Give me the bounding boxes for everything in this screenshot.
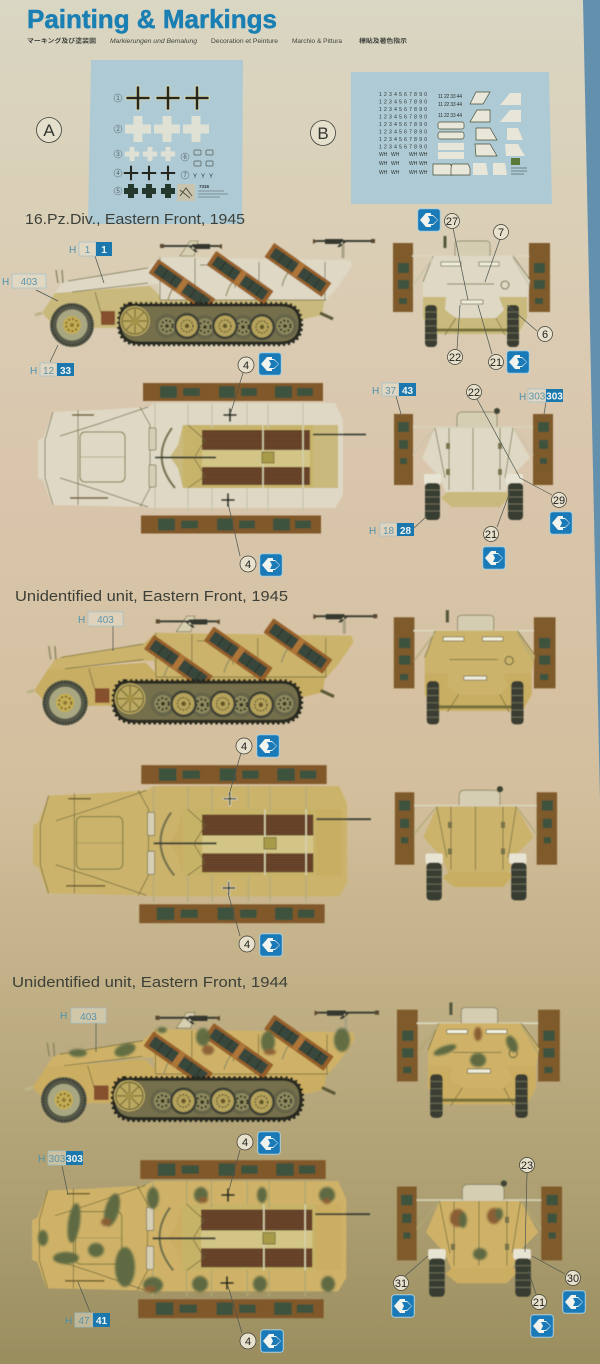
- vehicle 3 side view with camouflage: [25, 1011, 379, 1123]
- vehicle 1 front view: [393, 236, 550, 347]
- decal sheet B: 11 22 33 44: [438, 113, 462, 119]
- callout: H 403: [60, 1008, 106, 1052]
- callout: H 1 / 1: [69, 242, 112, 283]
- callout: H 403: 403: [80, 1012, 97, 1023]
- scheme heading: unidentified 1945: Unidentified unit, Eastern Front, 1945: [15, 588, 288, 605]
- callout: rear view decals: 21: [485, 529, 497, 541]
- callout: H 403: H: [2, 277, 9, 288]
- callout: H 18 / 28: H: [369, 526, 376, 537]
- callout: front view decals: [418, 209, 552, 373]
- vehicle 2 side view: [27, 614, 377, 725]
- callout: rear view decals: 30: [567, 1273, 579, 1285]
- callout: H 37 / 43: H: [372, 386, 379, 397]
- callout: H 303 / 303: 303: [529, 392, 546, 402]
- callout: H 1 / 1: H: [69, 245, 76, 256]
- callout: H 303 / 303: 303: [49, 1154, 66, 1165]
- decal sheet B: 11 22 33 44: [438, 94, 462, 100]
- decal sheet B: WH: [379, 161, 388, 167]
- decal sheet B: WH: [391, 161, 400, 167]
- decal sheet A: 1: [116, 96, 120, 102]
- marker: A: [36, 118, 62, 142]
- callout: rear view decals: 23: [521, 1160, 533, 1172]
- decal sheet B: WH: [391, 170, 400, 176]
- blue page edge strip: [583, 0, 600, 800]
- callout: H 12 / 33: 33: [60, 366, 71, 377]
- decal sheet B: 1 2 3 4 5 6 7 8 9 0: [379, 100, 427, 106]
- callout: H 303 / 303: H: [519, 392, 526, 403]
- multilingual subtitle row: [27, 37, 407, 45]
- callout: rear view decals: 31: [395, 1278, 407, 1290]
- callout: H 403: [2, 274, 58, 301]
- callout: H 303 / 303: H: [38, 1154, 45, 1165]
- callout: decal 4 lower: 4: [245, 1336, 251, 1348]
- callout: H 47 / 41: [65, 1282, 110, 1327]
- multilingual subtitle row: Markierungen und Bemalung: [110, 38, 198, 45]
- decal sheet B: WH: [409, 170, 418, 176]
- decal sheet B: WH: [379, 170, 388, 176]
- decal sheet B: WH: [409, 161, 418, 167]
- title: Painting & Markings: [27, 4, 277, 34]
- callout: front view decals: 21: [490, 357, 502, 369]
- vehicle 1 side view: [35, 239, 375, 347]
- callout: front view decals: 6: [542, 329, 548, 341]
- callout: H 403: 403: [21, 277, 38, 288]
- multilingual subtitle row: マーキング及び塗装図: [27, 37, 96, 45]
- decal sheet B: WH: [419, 152, 428, 158]
- decal sheet A: [88, 60, 243, 224]
- callout: decal 4 upper: [229, 735, 279, 795]
- callout: H 18 / 28: 18: [383, 526, 394, 537]
- callout: decal 4 lower: [228, 1286, 283, 1352]
- callout: decal 4 lower: [228, 893, 282, 956]
- callout: rear view decals: 21: [533, 1297, 545, 1309]
- decal sheet B: 1 2 3 4 5 6 7 8 9 0: [379, 130, 427, 136]
- callout: H 303 / 303: [38, 1151, 83, 1195]
- vehicle 2 front view: [394, 610, 556, 724]
- callout: H 37 / 43: 37: [385, 386, 396, 397]
- decal sheet B: 1 2 3 4 5 6 7 8 9 0: [379, 122, 427, 128]
- callout: H 12 / 33: H: [30, 366, 37, 377]
- callout: H 1 / 1: 1: [101, 245, 107, 256]
- decal sheet B: 1 2 3 4 5 6 7 8 9 0: [379, 137, 427, 143]
- callout: decal 4 lower: 4: [245, 559, 251, 571]
- decal sheet B: 11 22 33 44: [438, 102, 462, 108]
- decal sheet B: WH: [391, 152, 400, 158]
- vehicle 2 rear view: [395, 786, 557, 900]
- decal sheet B: 1 2 3 4 5 6 7 8 9 0: [379, 114, 427, 120]
- callout: front view decals: 27: [446, 216, 458, 228]
- multilingual subtitle row: 標貼及著色指示: [359, 37, 407, 45]
- callout: decal 4 lower: 4: [244, 939, 250, 951]
- callout: decal 4 upper: [231, 353, 281, 412]
- decal sheet A: 4: [116, 171, 120, 177]
- decal sheet A: 6: [183, 155, 187, 161]
- decal sheet A: 5: [116, 189, 120, 195]
- multilingual subtitle row: Decoration et Peinture: [211, 38, 279, 45]
- marker: B: B: [317, 124, 329, 143]
- callout: H 403: H: [78, 615, 85, 626]
- marker: A: A: [43, 121, 55, 140]
- decal sheet B: 1 2 3 4 5 6 7 8 9 0: [379, 144, 427, 150]
- callout: H 403: H: [60, 1011, 67, 1022]
- multilingual subtitle row: Marchio & Pittura: [292, 38, 343, 45]
- callout: H 12 / 33: [30, 345, 74, 377]
- callout: rear view decals: [466, 384, 572, 569]
- callout: rear view decals: 22: [468, 387, 480, 399]
- callout: front view decals: 22: [449, 352, 461, 364]
- decal sheet A: 2: [116, 127, 120, 133]
- callout: H 403: 403: [97, 615, 114, 626]
- callout: rear view decals: 29: [553, 495, 565, 507]
- vehicle 3 rear view with camouflage: [397, 1180, 562, 1297]
- callout: decal 4 upper: 4: [243, 360, 249, 372]
- vehicle 2 top view: [33, 765, 371, 923]
- callout: rear view decals: [392, 1158, 585, 1337]
- vehicle 1 top view: [38, 383, 366, 534]
- vehicle 3 front view with camouflage: [397, 1002, 560, 1118]
- callout: H 37 / 43: 43: [402, 386, 413, 397]
- callout: H 47 / 41: 47: [78, 1316, 90, 1327]
- callout: H 37 / 43: [372, 383, 416, 414]
- callout: H 47 / 41: 41: [96, 1316, 107, 1327]
- callout: H 18 / 28: 28: [400, 526, 411, 537]
- decal sheet B: WH: [419, 170, 428, 176]
- decal sheet B: 1 2 3 4 5 6 7 8 9 0: [379, 107, 427, 113]
- callout: H 403: [78, 612, 123, 651]
- callout: H 12 / 33: 12: [43, 366, 54, 377]
- vehicle 1 rear view: [394, 408, 553, 520]
- vehicle 3 top view with camouflage: [32, 1160, 370, 1318]
- decal sheet B: WH: [409, 152, 418, 158]
- decal sheet A: 3: [116, 152, 120, 158]
- scheme heading: unidentified 1944: Unidentified unit, Eastern Front, 1944: [12, 974, 288, 991]
- callout: H 47 / 41: H: [65, 1316, 72, 1327]
- decal sheet A: Y Y Y: [193, 174, 213, 180]
- decal sheet B: WH: [419, 161, 428, 167]
- marker: B: [310, 120, 336, 146]
- decal sheet A: 7: [183, 173, 187, 179]
- callout: decal 4 upper: 4: [242, 1137, 248, 1149]
- decal sheet B: 1 2 3 4 5 6 7 8 9 0: [379, 92, 427, 98]
- callout: decal 4 lower: [228, 503, 282, 576]
- decal sheet A: 7316: [199, 184, 210, 189]
- decal sheet B: WH: [379, 152, 388, 158]
- callout: H 1 / 1: 1: [85, 245, 91, 256]
- callout: front view decals: 7: [498, 227, 504, 239]
- callout: H 303 / 303: [519, 389, 563, 414]
- callout: decal 4 upper: [229, 1132, 280, 1190]
- callout: decal 4 upper: 4: [241, 741, 247, 753]
- scheme heading: 16.Pz.Div.: 16.Pz.Div., Eastern Front, 1945: [25, 211, 245, 228]
- decal sheet B: [351, 72, 552, 204]
- callout: H 303 / 303: 303: [66, 1154, 83, 1165]
- callout: H 18 / 28: [369, 516, 427, 537]
- callout: H 303 / 303: 303: [546, 392, 563, 402]
